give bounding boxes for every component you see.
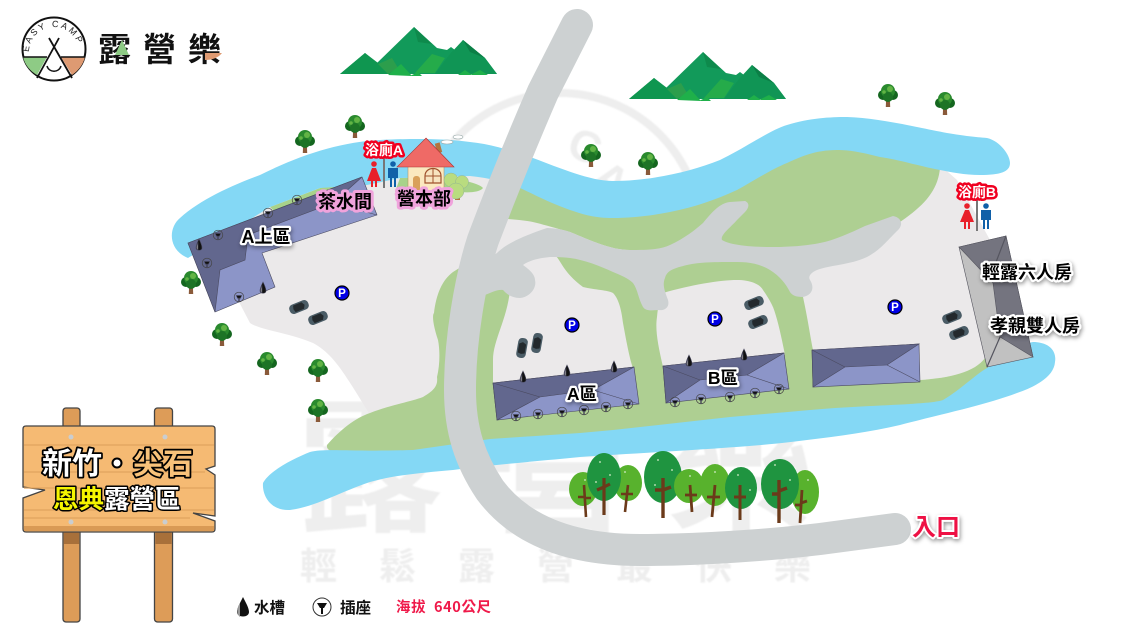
- logo: Easy Camp: EASY CAMP: [22, 20, 82, 52]
- mountain left: [340, 27, 497, 76]
- wooden sign: 新竹: [42, 439, 102, 483]
- road branches: [480, 201, 901, 310]
- logo: Easy Camp: 露營樂: [98, 23, 233, 71]
- wooden sign: 恩典露營區: [53, 479, 181, 516]
- legend: power outlet: [313, 596, 371, 618]
- restroom B: 浴廁B: [958, 184, 996, 200]
- mountain right: [629, 52, 786, 101]
- green area: north lawn: [508, 140, 940, 255]
- small trees: [181, 84, 955, 422]
- watermark: camp logo and slogan: 輕鬆露營最快樂: [300, 536, 853, 590]
- ground pocket: zone B: [656, 280, 785, 367]
- watermark: camp logo and slogan: C: [562, 118, 608, 175]
- legend: water sink: 水槽: [254, 596, 286, 618]
- main road: [460, 25, 895, 550]
- label: zone A: A區: [567, 384, 597, 404]
- wooden sign: 尖石: [133, 439, 193, 483]
- restroom B: [958, 184, 996, 231]
- cars: [288, 295, 970, 359]
- river north: [172, 117, 1010, 258]
- wooden sign: [23, 408, 215, 622]
- watermark: camp logo and slogan: 露營樂: [298, 352, 853, 562]
- building: zone A upper: [188, 177, 377, 312]
- label: six-person cabin: 輕露六人房: [982, 262, 1072, 282]
- watermark: camp logo and slogan: A: [584, 151, 638, 209]
- green strip above tea house: [270, 178, 362, 217]
- building: zone A: [493, 361, 639, 421]
- label: zone A upper: A上區: [242, 227, 290, 247]
- label: entrance: 入口: [912, 514, 960, 541]
- watermark: camp logo and slogan: [298, 93, 853, 590]
- logo: Easy Camp: [22, 16, 233, 82]
- building: zone B: [663, 349, 789, 407]
- label: tea room: 茶水間: [318, 192, 372, 212]
- legend: power outlet: 插座: [340, 596, 371, 618]
- building: third block: [812, 344, 920, 387]
- green area: south band: [327, 255, 990, 455]
- label: camp office: 營本部: [397, 188, 451, 209]
- label: zone B: B區: [708, 368, 738, 388]
- large tree grove: [569, 451, 819, 523]
- house: camp office: [397, 135, 468, 200]
- restroom A: 浴廁A: [365, 142, 403, 158]
- green patch under house: [395, 176, 483, 192]
- legend: water sink: [237, 596, 286, 618]
- campground base: [190, 140, 1000, 418]
- ground pocket: zone A: [493, 255, 634, 385]
- altitude note: 海拔 640公尺: [396, 596, 492, 617]
- restroom A: [365, 142, 403, 188]
- river south: [263, 342, 1055, 510]
- building: cabins: [959, 236, 1033, 367]
- parking icons: [335, 286, 902, 332]
- label: two-person room: 孝親雙人房: [990, 316, 1080, 336]
